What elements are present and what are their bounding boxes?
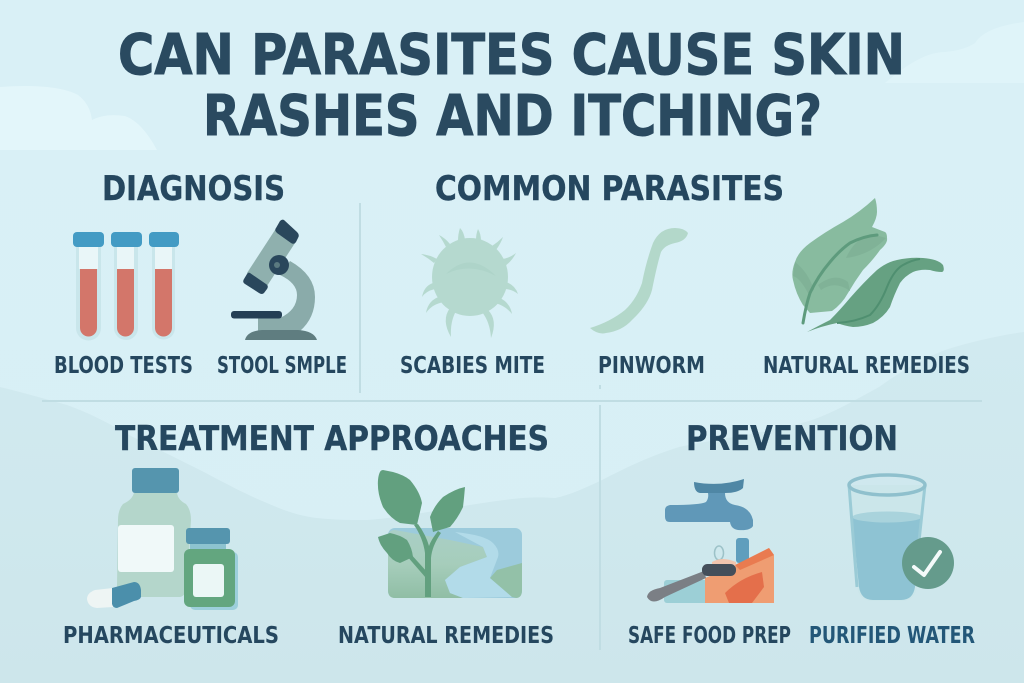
label: stool sample: STOOL SMPLE — [217, 353, 347, 379]
label: natural remedies: NATURAL REMEDIES — [763, 353, 970, 379]
icon: scabies mite — [421, 228, 518, 338]
panel: common parasites — [400, 169, 970, 379]
icon: plant and landscape — [378, 470, 522, 598]
icon: leaves — [792, 198, 944, 332]
label: blood tests: BLOOD TESTS — [54, 353, 193, 379]
heading: treatment approaches: TREATMENT APPROACHES — [115, 419, 549, 459]
dividers — [42, 203, 982, 650]
title: RASHES AND ITCHING? — [203, 84, 822, 149]
icon: microscope — [231, 220, 317, 340]
label: pinworm: PINWORM — [598, 353, 705, 379]
label: pharmaceuticals: PHARMACEUTICALS — [63, 623, 279, 649]
icon: pinworm — [590, 228, 688, 333]
title: CAN PARASITES CAUSE SKIN — [118, 23, 905, 88]
label: purified water: PURIFIED WATER — [809, 623, 975, 649]
icon: blood test tubes — [73, 232, 179, 340]
icon: tap and food prep — [647, 479, 774, 603]
icon: glass of purified water — [849, 475, 954, 601]
heading: prevention: PREVENTION — [686, 419, 898, 459]
panel: diagnosis — [54, 169, 347, 379]
title — [118, 23, 905, 149]
icon: medicine bottles and pill — [87, 468, 238, 610]
panel: prevention — [628, 419, 975, 649]
label: safe food prep: SAFE FOOD PREP — [628, 623, 791, 649]
label: natural remedies: NATURAL REMEDIES — [338, 623, 554, 649]
panel: treatment approaches — [63, 419, 554, 649]
heading: common parasites: COMMON PARASITES — [435, 169, 784, 209]
label: scabies mite: SCABIES MITE — [400, 353, 545, 379]
heading: diagnosis: DIAGNOSIS — [102, 169, 285, 209]
